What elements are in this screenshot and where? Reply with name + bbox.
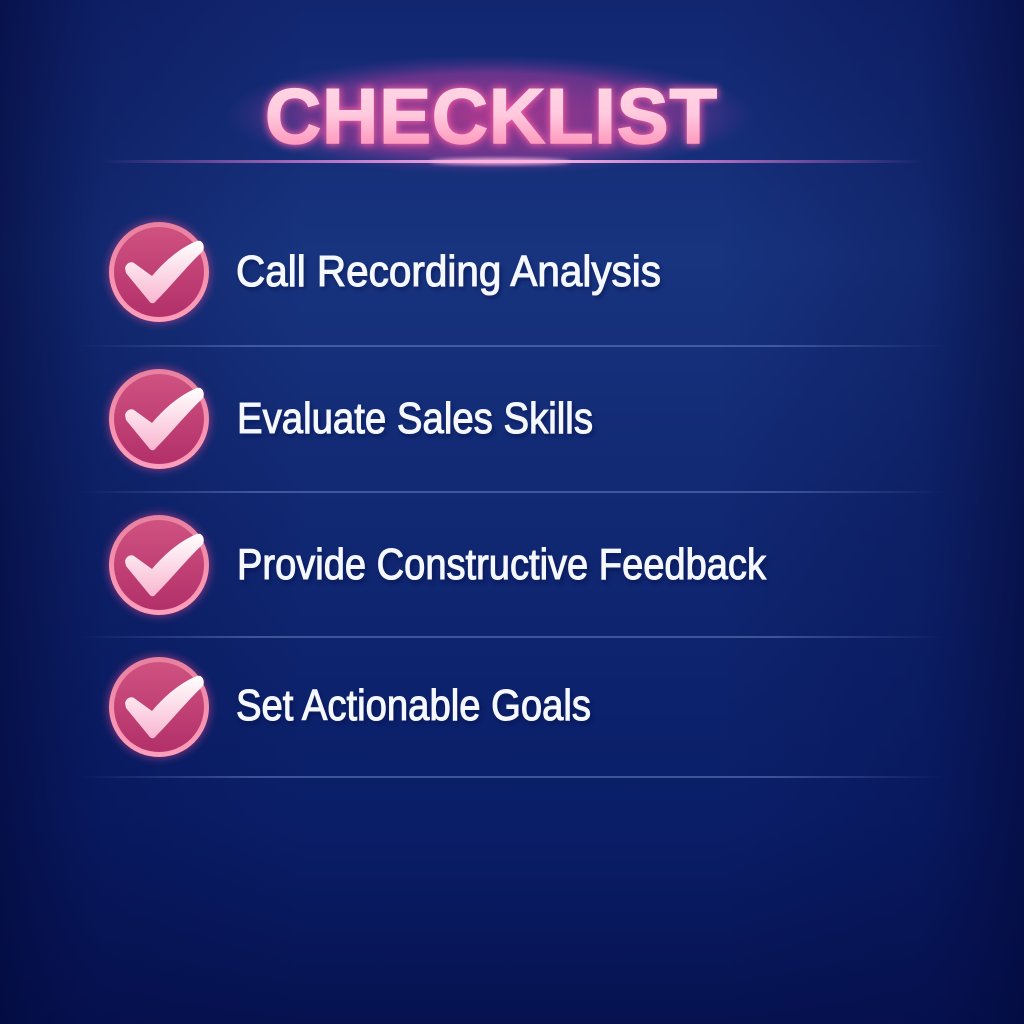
item 4: set actionable goals [107, 655, 593, 759]
title: CHECKLIST [265, 72, 717, 160]
label 3: Provide Constructive Feedback [239, 543, 769, 592]
label 1: Call Recording Analysis [238, 250, 663, 299]
label 2: Evaluate Sales Skills [237, 394, 593, 443]
title: CHECKLIST [265, 72, 717, 160]
divider 1 [80, 345, 944, 347]
icon: check badge 4 [107, 655, 211, 759]
title underline [100, 158, 924, 164]
label 1: Call Recording Analysis [236, 247, 661, 296]
label 4: Set Actionable Goals [236, 681, 591, 730]
icon: check badge 3 [107, 513, 211, 617]
item 1: call recording analysis [107, 220, 663, 324]
label 3: Provide Constructive Feedback [237, 540, 767, 589]
label 2: Evaluate Sales Skills [239, 397, 595, 446]
title [225, 55, 755, 175]
icon: check badge 1 [107, 220, 211, 324]
item 2: evaluate sales skills [107, 367, 595, 471]
label 4: Set Actionable Goals [238, 684, 593, 733]
divider 3 [80, 636, 944, 638]
divider 4 [80, 776, 944, 778]
divider 2 [80, 491, 944, 493]
item 3: provide constructive feedback [107, 513, 769, 617]
icon: check badge 2 [107, 367, 211, 471]
